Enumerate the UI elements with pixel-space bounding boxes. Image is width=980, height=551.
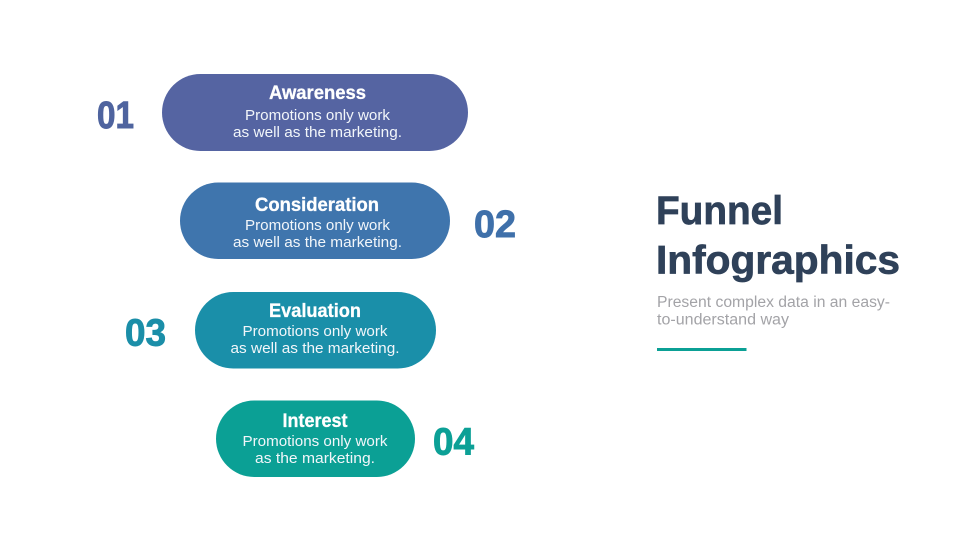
consideration pill [180, 182, 450, 259]
title [656, 189, 900, 282]
panel: interest stage [216, 400, 474, 477]
number 01: 01 [97, 95, 134, 137]
accent line [657, 348, 746, 351]
subtitle text: Present complex data in an easy- [657, 294, 890, 311]
number 04: 04 [433, 422, 474, 464]
panel: consideration stage [180, 182, 516, 259]
evaluation description: as well as the marketing. [230, 340, 400, 357]
subtitle text [657, 294, 890, 328]
consideration description [233, 217, 402, 251]
subtitle text: to-understand way [657, 312, 789, 328]
number 02: 02 [474, 204, 516, 246]
consideration description: as well as the marketing. [233, 234, 402, 251]
title: Infographics [656, 238, 900, 282]
awareness description: Promotions only work [245, 107, 391, 124]
interest heading: Interest [282, 411, 348, 432]
consideration description: Promotions only work [245, 217, 391, 234]
awareness pill [162, 74, 468, 151]
evaluation pill [195, 292, 436, 368]
panel: evaluation stage [125, 292, 436, 368]
evaluation heading: Evaluation [269, 301, 361, 322]
title: Funnel [656, 189, 783, 233]
interest description [242, 433, 388, 467]
awareness heading: Awareness [269, 83, 366, 104]
number 03: 03 [125, 312, 166, 354]
interest description: Promotions only work [242, 433, 388, 450]
awareness description: as well as the marketing. [233, 124, 402, 141]
interest pill [216, 400, 415, 477]
awareness description [233, 107, 402, 141]
interest description: as the marketing. [255, 450, 375, 467]
evaluation description [230, 323, 400, 357]
evaluation description: Promotions only work [242, 323, 388, 340]
panel: awareness stage [97, 74, 468, 151]
consideration heading: Consideration [255, 195, 379, 216]
